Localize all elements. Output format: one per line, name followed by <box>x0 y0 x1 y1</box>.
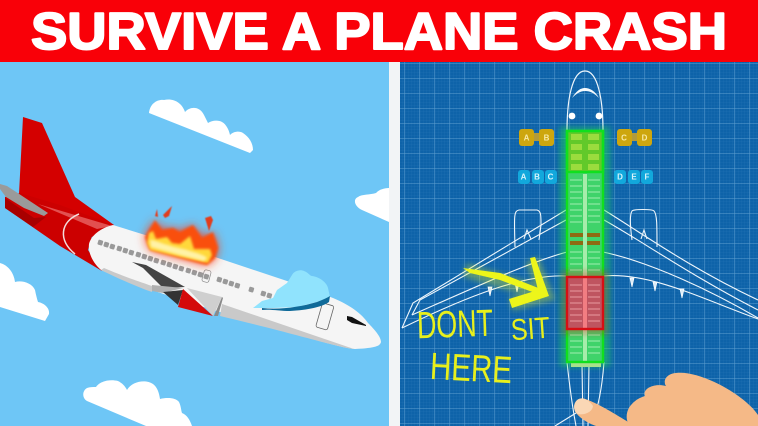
seat labels: first class left: B <box>544 134 550 142</box>
title: SURVIVE A PLANE CRASH <box>31 3 727 61</box>
hand <box>574 373 758 426</box>
seat labels: economy left: C <box>548 172 554 182</box>
horizontal stabiliser <box>0 184 48 216</box>
cloud: bottom <box>83 380 192 426</box>
rear galley <box>571 363 601 367</box>
tail fin <box>19 117 114 238</box>
cabin <box>567 131 603 367</box>
seats <box>571 134 599 170</box>
nose lights <box>569 113 575 119</box>
divider <box>389 62 400 426</box>
handwritten note: SIT <box>510 312 551 347</box>
fuselage <box>89 225 381 349</box>
seat labels: economy right: F <box>645 172 650 182</box>
tail ring <box>63 214 79 254</box>
smoke <box>253 270 330 311</box>
wing <box>132 262 223 316</box>
seat labels: first class right: D <box>642 134 648 142</box>
handwritten note: HERE <box>429 346 513 392</box>
cloud: top centre <box>149 100 253 153</box>
wings <box>402 210 566 328</box>
cockpit windscreen <box>572 88 599 98</box>
green cabin glow <box>560 127 610 367</box>
rear fuselage shade <box>5 198 46 227</box>
cockpit window <box>347 316 366 326</box>
seat labels: first class right <box>617 129 652 146</box>
wing door <box>202 269 211 283</box>
arrow: yellow marker <box>463 257 549 308</box>
seat labels: economy right <box>614 170 653 184</box>
seat labels: economy right: D <box>617 172 623 182</box>
aisle <box>583 174 587 362</box>
front door <box>316 303 334 330</box>
seat labels: first class left: A <box>524 134 530 142</box>
seat labels: economy left <box>518 170 557 184</box>
rear fuselage <box>5 193 114 271</box>
airplane <box>0 117 381 349</box>
panel: sky <box>0 62 389 426</box>
fuselage highlight <box>38 204 112 229</box>
title banner <box>0 0 758 62</box>
seat labels: economy left: A <box>521 172 527 182</box>
engines <box>514 210 541 247</box>
fuselage belly shade <box>101 268 354 349</box>
danger zone <box>562 271 608 334</box>
rear fuselage <box>567 362 604 426</box>
fire <box>145 206 218 265</box>
seat labels: first class right: C <box>621 134 627 142</box>
exit row seats <box>570 233 600 245</box>
plane outline <box>402 71 758 426</box>
seat labels: first class left <box>519 129 554 146</box>
handwritten note: DONT <box>416 303 494 347</box>
window row <box>97 240 272 299</box>
cloud: left <box>0 263 49 321</box>
handwritten note <box>416 303 551 392</box>
under-wing fairings <box>488 278 684 298</box>
seat labels: economy left: B <box>534 172 540 182</box>
seat labels: economy right: E <box>631 172 637 182</box>
cloud: right <box>355 188 389 222</box>
panel: blueprint <box>400 62 758 426</box>
nose <box>567 71 603 131</box>
flame sparks <box>155 206 213 231</box>
